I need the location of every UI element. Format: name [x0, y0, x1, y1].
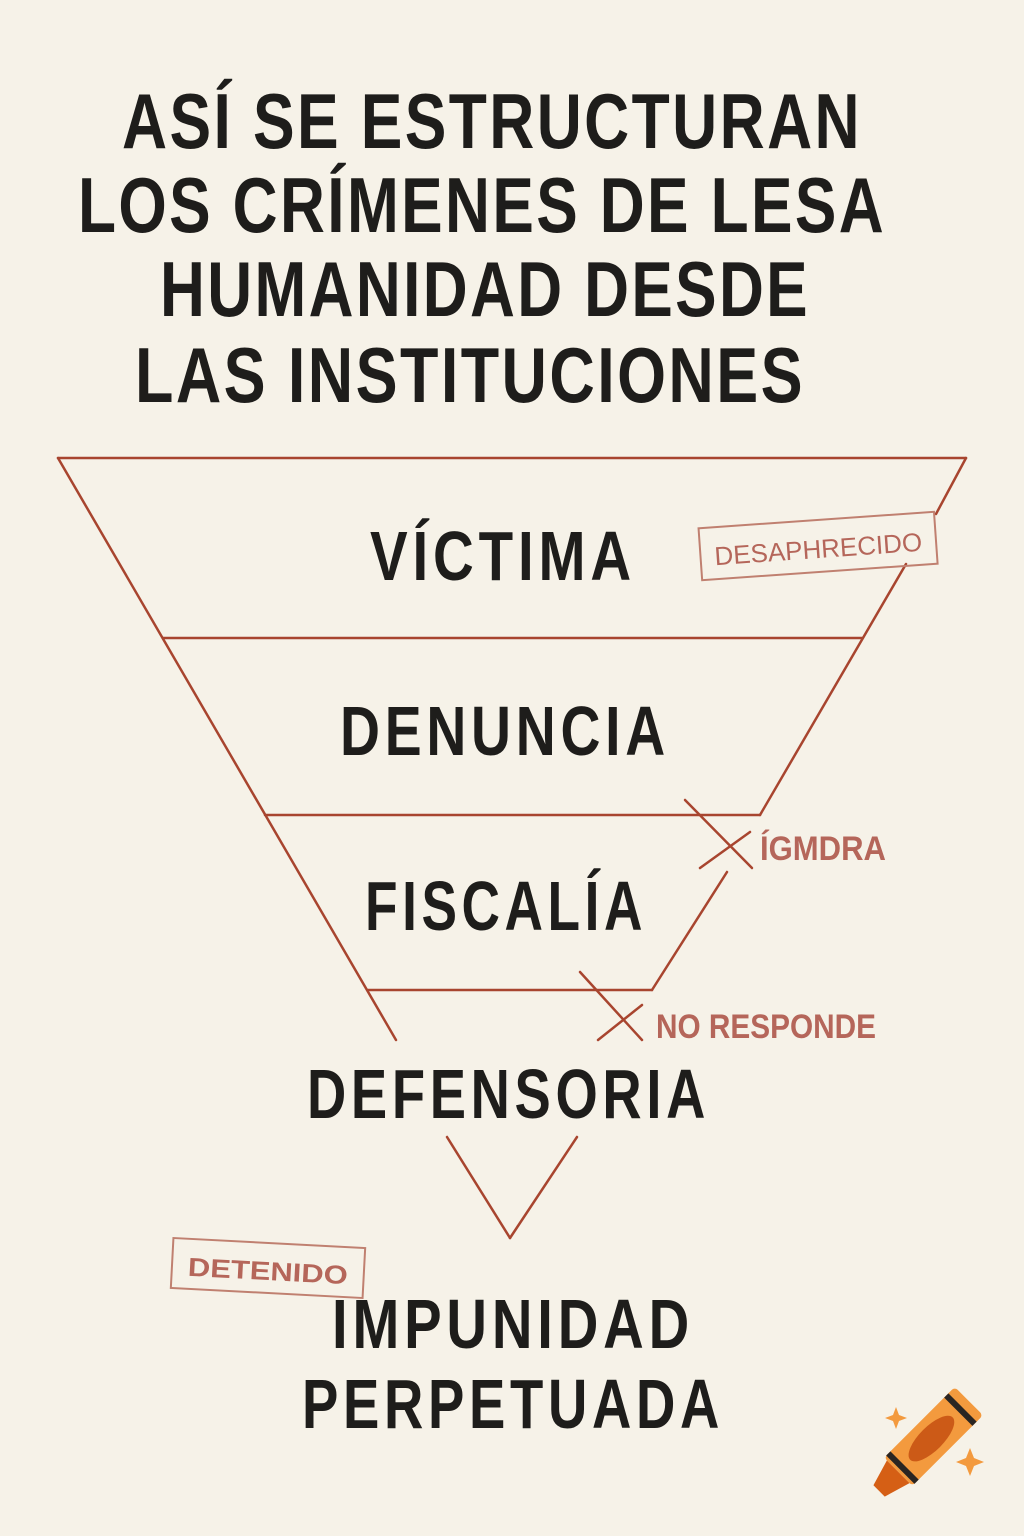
funnel labels: DEFENSORIA — [307, 1055, 710, 1133]
cross mark: ignora — [685, 800, 752, 868]
funnel labels — [307, 517, 710, 1133]
icon: sparkles — [885, 1407, 984, 1476]
icon: crayon — [865, 1387, 983, 1505]
note: ignora: ÍGMDRA — [760, 830, 886, 868]
title: HUMANIDAD DESDE — [160, 245, 810, 333]
outcome label: IMPUNIDAD — [332, 1285, 694, 1363]
funnel labels: FISCALÍA — [365, 867, 647, 945]
stamp: desaparecido — [699, 512, 938, 580]
stamp: desaparecido: DESAPHRECIDO — [713, 527, 923, 571]
title: LAS INSTITUCIONES — [135, 331, 805, 419]
stamp: detenido — [171, 1238, 365, 1298]
outcome label: PERPETUADA — [302, 1365, 724, 1443]
cross mark: no responde — [580, 972, 642, 1040]
note: no responde: NO RESPONDE — [656, 1008, 876, 1046]
outcome label — [302, 1285, 724, 1443]
stamp: detenido: DETENIDO — [187, 1252, 349, 1290]
title — [78, 77, 886, 419]
funnel labels: DENUNCIA — [340, 692, 670, 770]
funnel diagram — [58, 458, 966, 1238]
title: ASÍ SE ESTRUCTURAN — [122, 77, 862, 165]
funnel labels: VÍCTIMA — [370, 517, 636, 595]
